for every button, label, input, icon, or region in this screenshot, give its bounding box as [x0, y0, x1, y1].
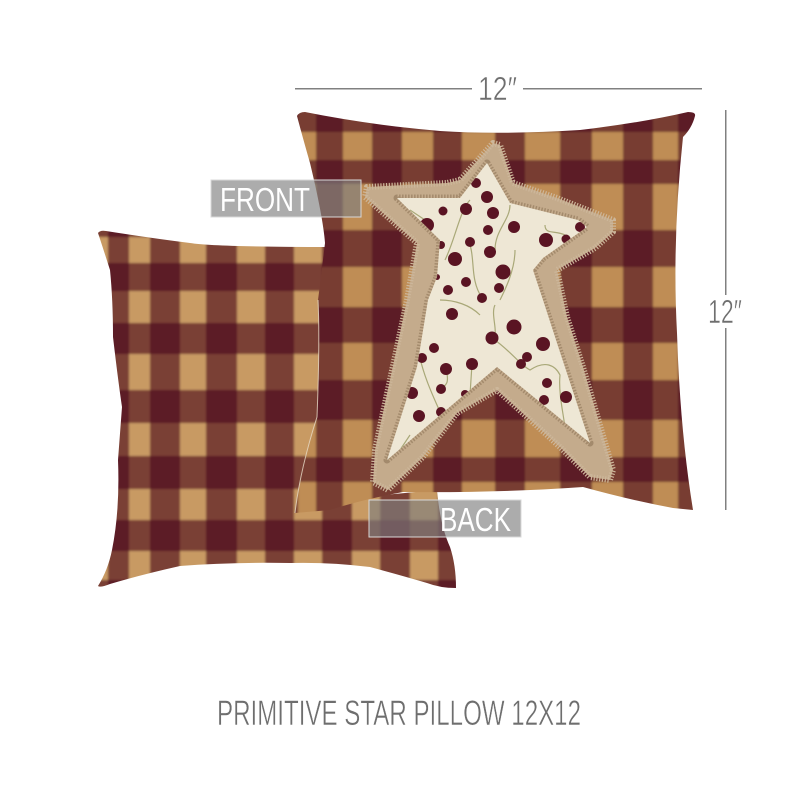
- label: back: [369, 500, 521, 538]
- star fabric: [387, 163, 590, 460]
- panel: back pillow: [98, 230, 456, 588]
- panel: front pillow: [285, 105, 705, 525]
- dimension: height: 12″: [708, 293, 742, 330]
- star applique: [365, 143, 613, 490]
- berries: [406, 178, 585, 422]
- vines: [400, 200, 565, 450]
- label: back: BACK: [440, 501, 511, 538]
- title: PRIMITIVE STAR PILLOW 12X12: [217, 694, 581, 733]
- pillow seam: [295, 300, 319, 513]
- label: front: FRONT: [220, 181, 310, 218]
- infographic canvas: [98, 77, 742, 726]
- dimension: width: 12″: [478, 70, 517, 107]
- star fringe: [365, 143, 613, 490]
